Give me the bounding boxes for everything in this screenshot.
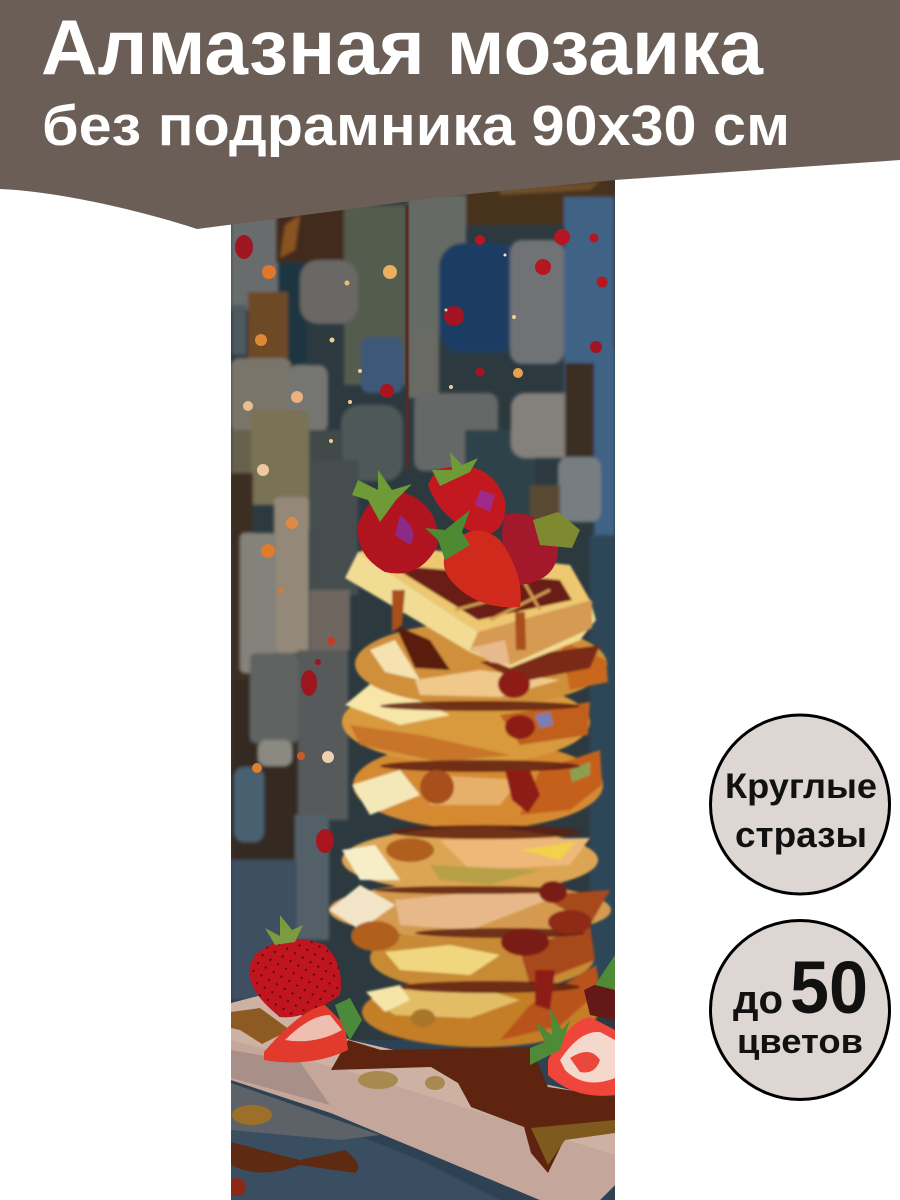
waffle 7	[329, 882, 611, 938]
floating syrup drops and sparks	[235, 229, 608, 853]
badge: round rhinestones	[710, 715, 890, 894]
table and cutting board	[228, 995, 615, 1200]
badge: up to 50 colours: 50	[790, 946, 868, 1029]
syrup pool	[331, 1040, 615, 1173]
waffle 6	[342, 828, 598, 892]
waffle 3	[355, 622, 607, 706]
waffle 5	[353, 741, 603, 829]
syrup drip line	[406, 205, 408, 470]
waffle stack	[329, 545, 611, 1047]
badge: up to 50 colours: до	[733, 978, 783, 1022]
badge: round rhinestones: стразы	[735, 814, 867, 855]
waffle 8	[368, 932, 595, 986]
waffle 9	[362, 977, 598, 1047]
painting: waffle stack with strawberries	[228, 180, 615, 1200]
header banner	[0, 0, 900, 229]
syrup drips	[351, 590, 592, 1027]
strawberries on the board	[249, 915, 615, 1096]
painted background brush strokes	[231, 180, 615, 1005]
gaps between waffles	[375, 701, 585, 993]
waffle 1	[345, 552, 596, 668]
badge: up to 50 colours: цветов	[737, 1023, 863, 1061]
badge: up to 50 colours	[710, 920, 890, 1100]
waffle 4	[340, 694, 592, 762]
strawberries on top	[352, 452, 580, 607]
title: Алмазная мозаика	[41, 3, 764, 91]
subtitle: без подрамника 90х30 см	[42, 94, 790, 158]
badge: round rhinestones: Круглые	[725, 767, 877, 806]
